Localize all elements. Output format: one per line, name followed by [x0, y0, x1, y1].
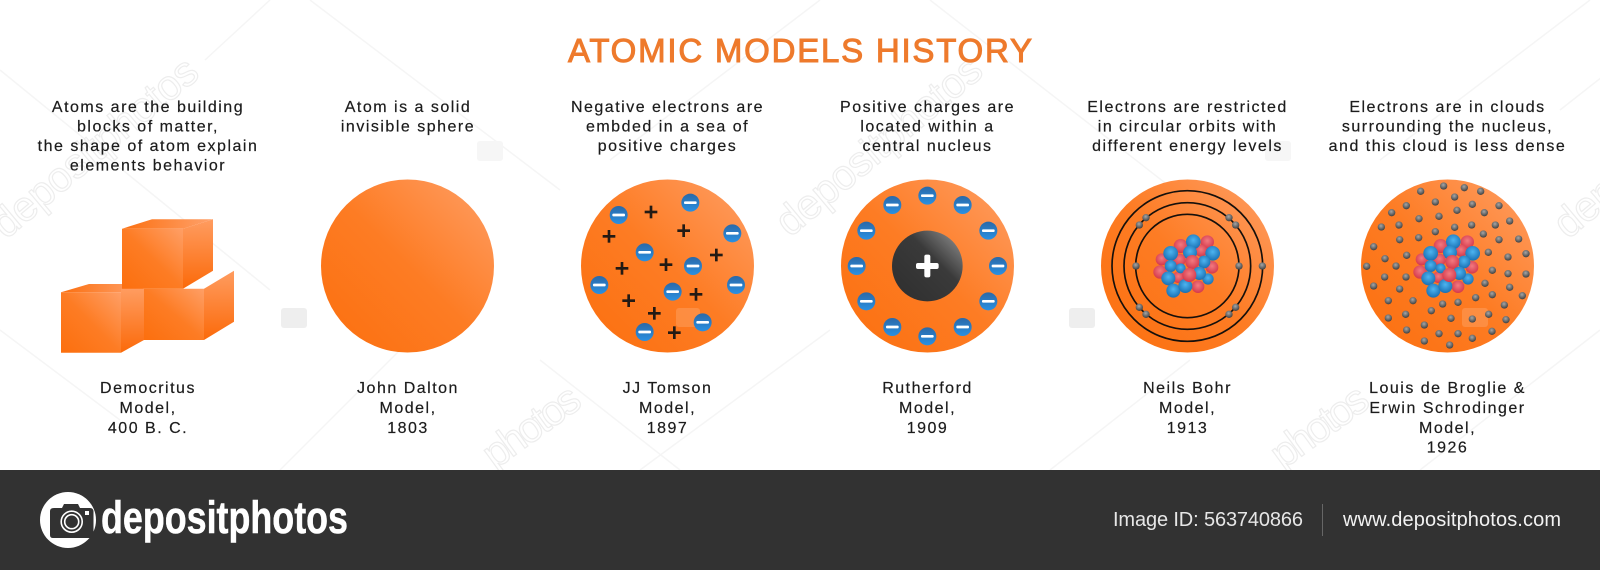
- description: Thomson: embded in a sea of: [586, 118, 749, 136]
- caption: Dalton: John Dalton: [357, 380, 459, 397]
- caption: Dalton: 1803: [387, 420, 429, 437]
- description: de Broglie and Schrodinger: Electrons are in clouds: [1349, 99, 1546, 116]
- caption: Rutherford: 1909: [907, 420, 948, 437]
- description: Democritus: the shape of atom explain: [38, 138, 258, 155]
- description: Democritus: Atoms are the building: [52, 99, 244, 116]
- caption: Bohr: 1913: [1167, 420, 1208, 437]
- logo wordmark: depositphotos: [101, 492, 348, 543]
- icon: Democritus cubes: [61, 219, 234, 353]
- caption: Democritus: Model,: [119, 400, 177, 417]
- diagram: Rutherford nucleus: [841, 180, 1014, 352]
- description: Rutherford: located within a: [860, 118, 995, 136]
- description: Democritus: elements behavior: [70, 158, 226, 174]
- description: de Broglie and Schrodinger: and this cloud is less dense: [1329, 138, 1566, 155]
- footer banner: [0, 470, 1600, 570]
- icon: Dalton solid sphere: [321, 180, 494, 352]
- caption: Bohr: Neils Bohr: [1143, 380, 1232, 397]
- watermarks: photos: [1261, 375, 1377, 477]
- caption: Thomson: 1897: [647, 420, 688, 437]
- description: de Broglie and Schrodinger: surrounding the nucleus,: [1342, 118, 1553, 136]
- caption: de Broglie and Schrodinger: Louis de Broglie &: [1369, 380, 1526, 397]
- image id: Image ID: 563740866: [1113, 509, 1303, 531]
- divider: [1322, 504, 1323, 536]
- caption: de Broglie and Schrodinger: Erwin Schrodinger: [1369, 400, 1526, 417]
- description: Bohr: different energy levels: [1092, 138, 1283, 155]
- description: Rutherford: Positive charges are: [840, 99, 1015, 116]
- caption: Dalton: Model,: [379, 400, 437, 417]
- caption: Democritus: 400 B. C.: [108, 420, 188, 437]
- diagram: Thomson plum pudding: [581, 180, 754, 352]
- caption: Rutherford: Rutherford: [882, 380, 973, 397]
- description: Dalton: invisible sphere: [341, 118, 475, 136]
- caption: de Broglie and Schrodinger: Model,: [1419, 420, 1476, 437]
- website: www.depositphotos.com: [1342, 509, 1561, 531]
- description: Thomson: positive charges: [598, 138, 737, 155]
- description: Thomson: Negative electrons are: [571, 99, 764, 116]
- caption: de Broglie and Schrodinger: 1926: [1427, 440, 1468, 456]
- caption: Thomson: Model,: [639, 400, 696, 417]
- diagram: electron cloud: [1361, 180, 1534, 352]
- title: ATOMIC MODELS HISTORY: [568, 32, 1032, 69]
- caption: Bohr: Model,: [1159, 400, 1216, 417]
- description: Rutherford: central nucleus: [862, 138, 993, 155]
- caption: Rutherford: Model,: [899, 400, 956, 417]
- description: Democritus: blocks of matter,: [77, 118, 219, 136]
- description: Bohr: in circular orbits with: [1098, 118, 1277, 136]
- caption: Thomson: JJ Tomson: [623, 380, 712, 397]
- watermarks: depositphotos: [766, 45, 991, 245]
- caption: Democritus: Democritus: [100, 380, 196, 397]
- icon: camera logo: [40, 492, 96, 548]
- diagram: Bohr orbits: [1101, 180, 1274, 352]
- watermarks: photos: [473, 375, 589, 477]
- description: Bohr: Electrons are restricted: [1087, 99, 1288, 116]
- description: Dalton: Atom is a solid: [345, 99, 471, 116]
